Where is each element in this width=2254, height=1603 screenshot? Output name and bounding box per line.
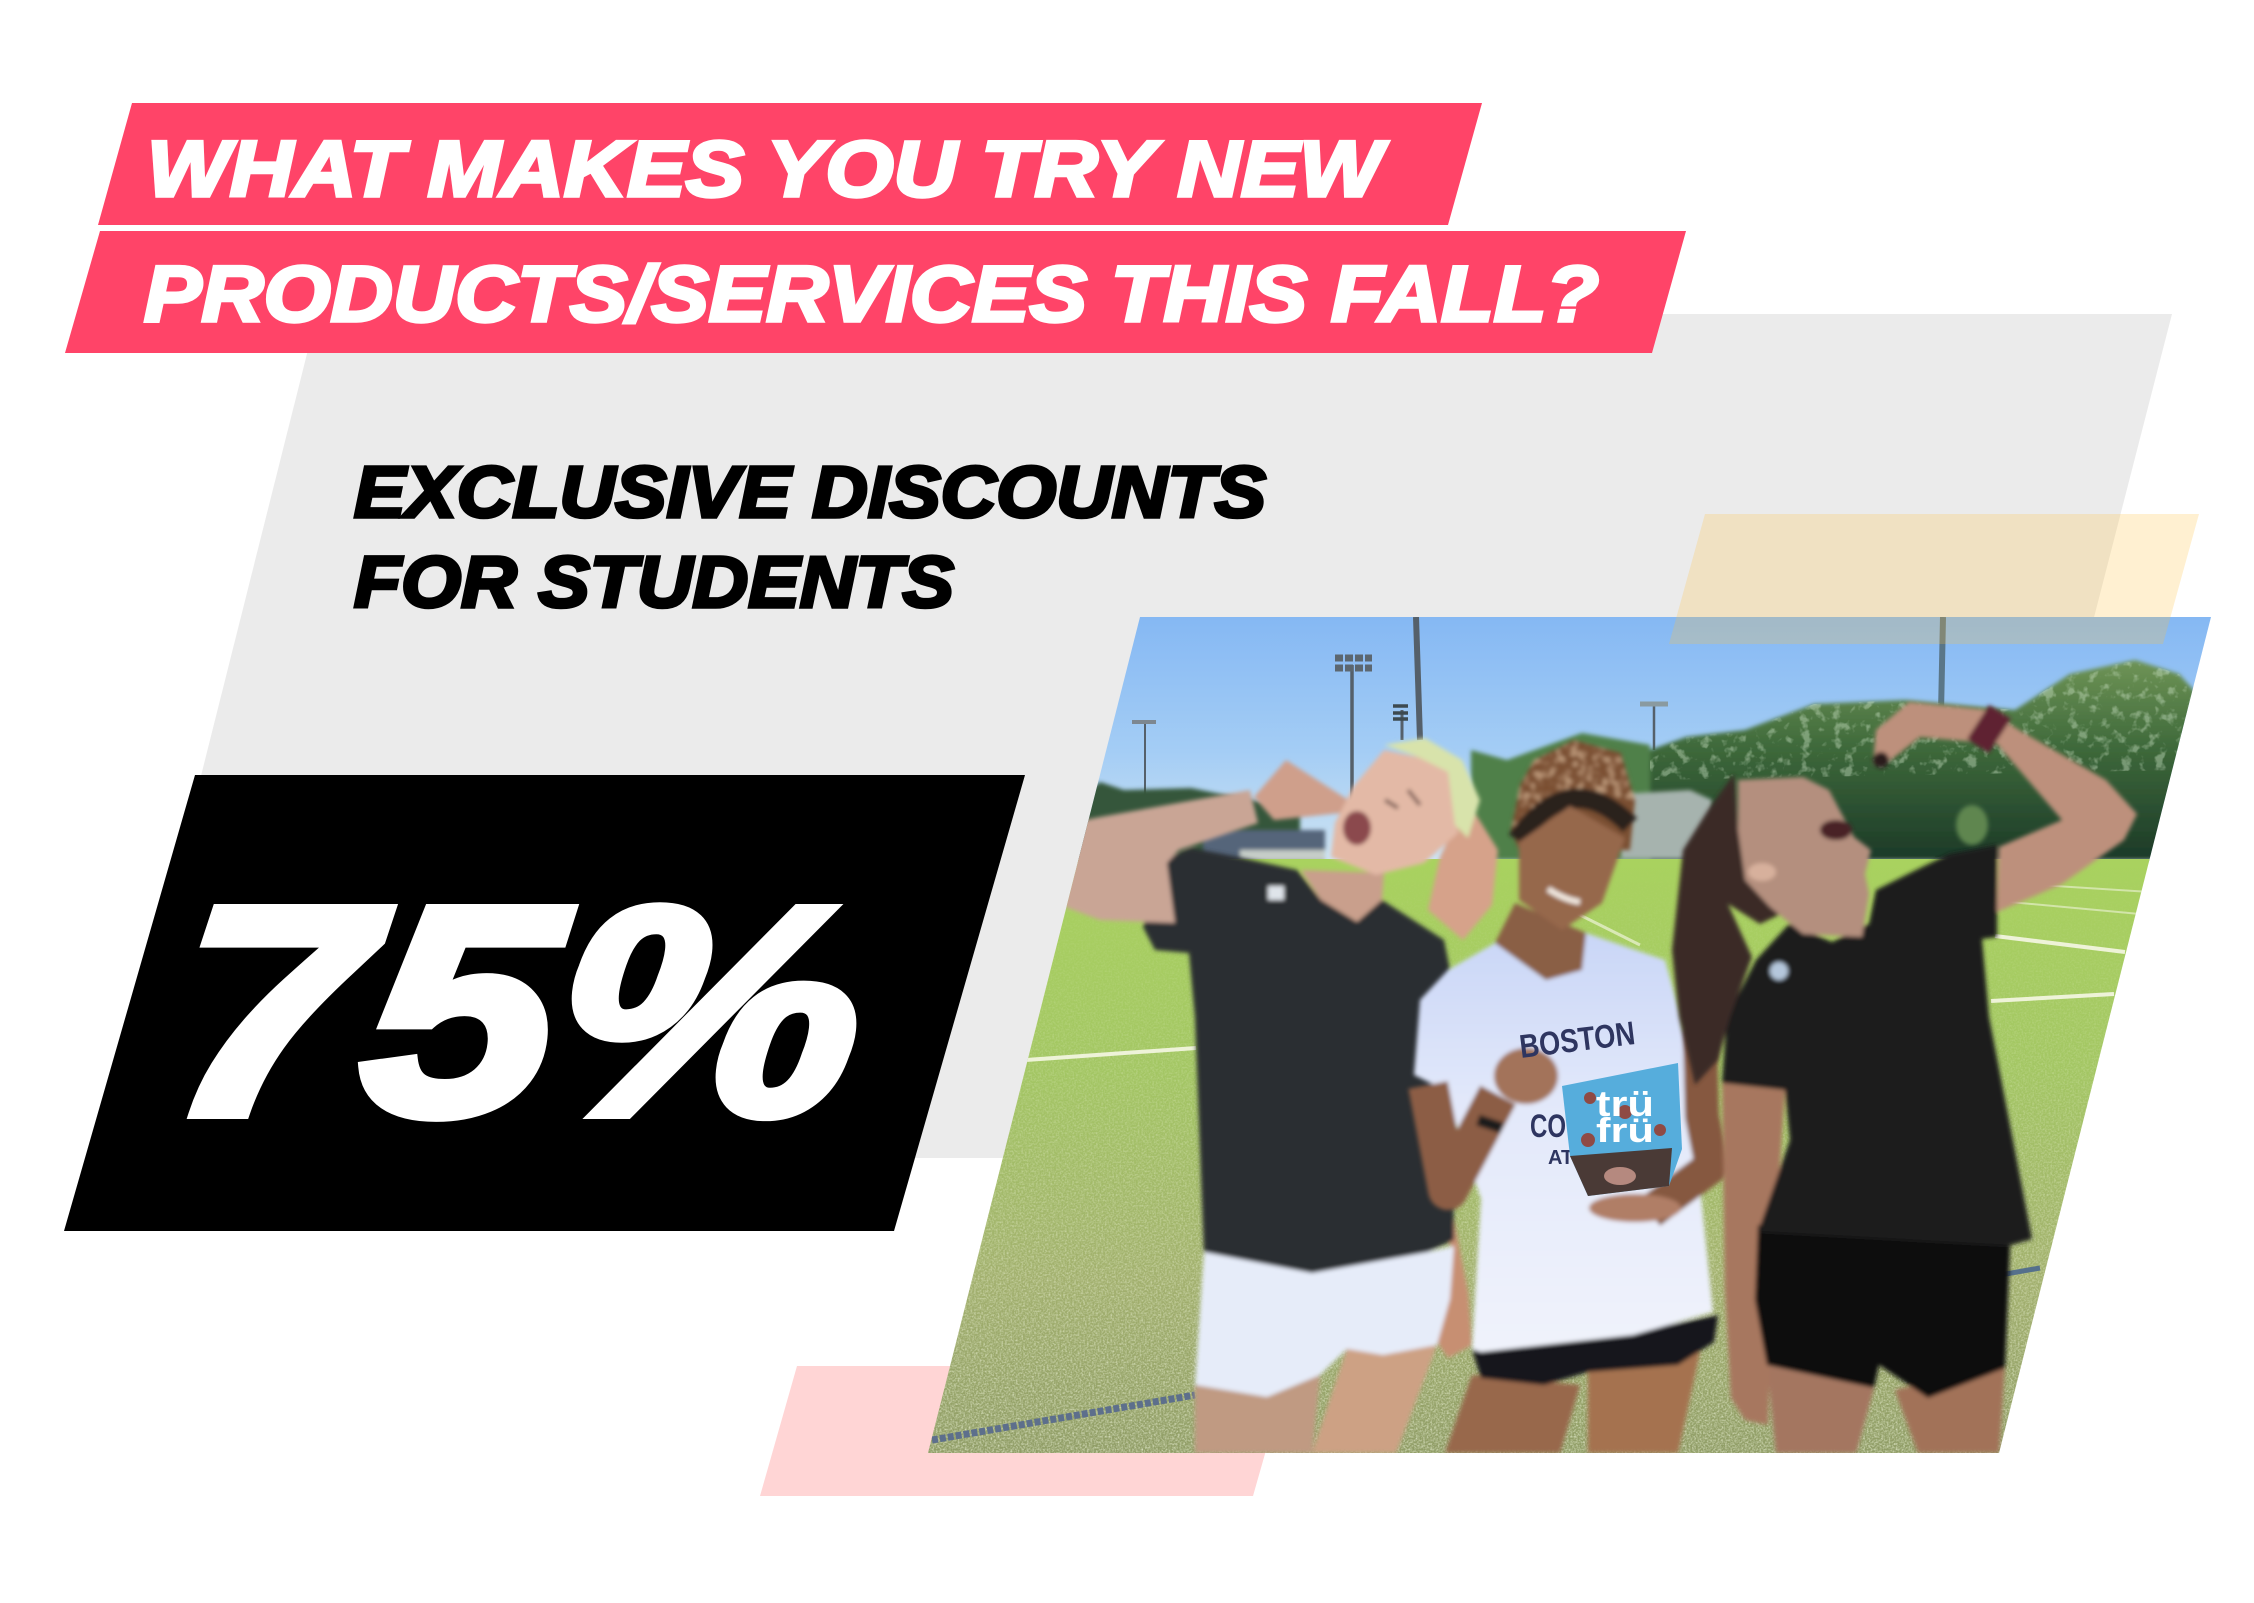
banner line 1: WHAT MAKES YOU TRY NEW: [147, 124, 1389, 213]
grass texture: [928, 915, 2126, 1453]
decorative translucent yellow block: [1669, 514, 2199, 644]
light poles: [1132, 617, 1946, 798]
curly hair: [1511, 740, 1635, 850]
raised arm: [1873, 702, 2137, 912]
white T-shirt: [1414, 933, 1713, 1352]
goal net: [1621, 790, 1712, 859]
black shirt: [1722, 845, 2032, 1246]
person: middle student: [1414, 740, 1718, 1453]
raised arm: [1060, 790, 1258, 923]
bag brand text: trü: [1596, 1083, 1654, 1124]
photo: three students on a sports field holding a snack bag: [920, 617, 2220, 1459]
shirt lettering: CO: [1530, 1108, 1566, 1144]
sky: [1088, 617, 2211, 861]
snack bite: [1873, 752, 1889, 768]
decorative pink block: [760, 1366, 1290, 1496]
legs: [1195, 1375, 1320, 1453]
black shirt: [1143, 848, 1454, 1273]
face and neck: [1738, 777, 1871, 937]
open mouth: [1343, 811, 1371, 845]
legs: [1445, 1375, 1580, 1453]
smile: [1548, 889, 1580, 902]
neck: [1495, 903, 1586, 980]
black shorts: [1472, 1315, 1718, 1385]
banner line 2: PRODUCTS/SERVICES THIS FALL?: [144, 249, 1599, 338]
neck: [1301, 870, 1384, 922]
banner line 2: [65, 231, 1686, 353]
face: [1519, 806, 1625, 930]
stat panel: black 75 percent: [64, 775, 1025, 1231]
strawberries on bag: [1581, 1092, 1666, 1147]
face: [1331, 750, 1458, 875]
black shorts: [1755, 1225, 2010, 1398]
big number: 75%: [158, 845, 879, 1178]
distant small green tree: [1956, 805, 1988, 845]
person: right student: [1672, 702, 2137, 1453]
heading: two-line pink banner: [65, 103, 1686, 353]
subheading: exclusive discounts for students: FOR STUDENTS: [354, 543, 954, 623]
background trees: [1060, 660, 2200, 862]
hanging hand: [1437, 1199, 1472, 1358]
left arm: [1428, 1085, 1498, 1190]
shirt logo: [1268, 886, 1284, 900]
legs: [1767, 1365, 1874, 1453]
white shorts: [1195, 1246, 1454, 1397]
ear: [1748, 863, 1776, 881]
open mouth: [1820, 820, 1852, 840]
hanging arm: [1722, 1083, 1785, 1425]
blue field line: [932, 1395, 1195, 1440]
banner line 1: [98, 103, 1482, 225]
wristband: [1478, 1120, 1502, 1128]
snack bag: frü: [1596, 1112, 1654, 1150]
subheading: exclusive discounts for students: [354, 453, 1266, 623]
shirt logo: [1770, 962, 1788, 980]
shirt lettering: [1520, 1022, 1634, 1164]
snack bag: [1562, 1063, 1682, 1196]
shirt lettering: BOSTON: [1517, 1014, 1637, 1065]
eyes: [1385, 790, 1420, 808]
watch: [1978, 712, 2000, 746]
hair and ponytail: [1672, 774, 1789, 1085]
hand: [1254, 760, 1353, 820]
bleachers: [1203, 830, 1325, 863]
field lines: [1026, 885, 2165, 1060]
tree leaf highlights: [1650, 660, 2200, 780]
subheading: exclusive discounts for students: EXCLUSIVE DISCOUNTS: [354, 453, 1266, 533]
ponytail: [1428, 800, 1498, 940]
grass field: [920, 859, 2220, 1459]
shirt lettering: AT: [1548, 1147, 1573, 1169]
panel: grey background parallelogram: [105, 314, 2172, 1158]
hair and headband: [1384, 738, 1480, 838]
person: left student: [1060, 738, 1498, 1453]
right arm: [1650, 1030, 1712, 1212]
